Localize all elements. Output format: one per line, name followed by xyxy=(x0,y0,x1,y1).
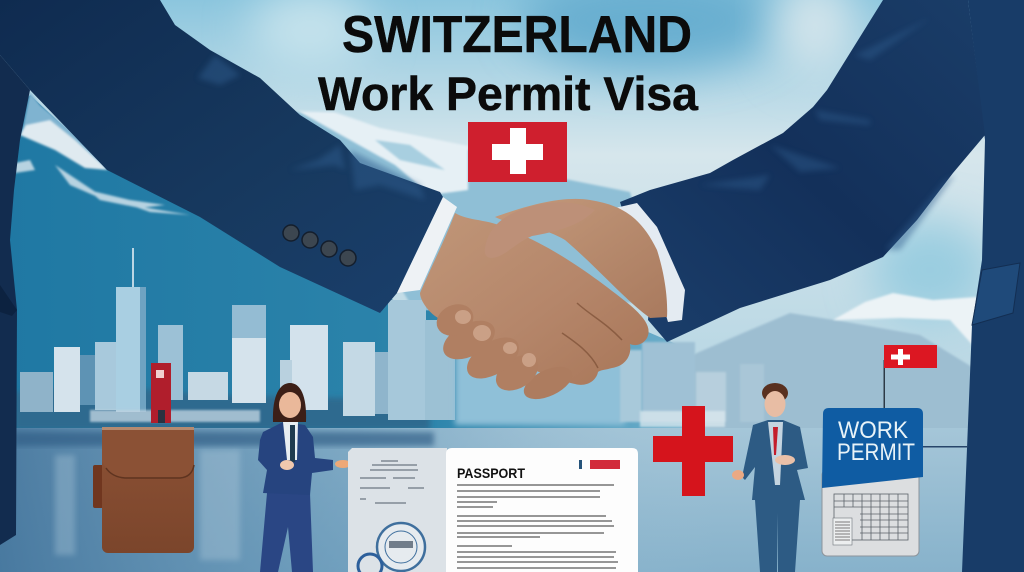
hand: folded fingers xyxy=(431,298,577,406)
icon: red cross xyxy=(653,406,733,496)
passport body text xyxy=(457,485,618,568)
card body xyxy=(822,470,919,556)
face xyxy=(279,392,301,418)
passport heading: PASSPORT xyxy=(457,465,525,481)
handshake xyxy=(420,199,667,406)
background: city skyline xyxy=(14,248,764,430)
right suit: jacket body xyxy=(962,0,1024,572)
hands xyxy=(732,470,744,480)
left suit: sleeve highlights xyxy=(198,55,425,200)
hair xyxy=(273,383,306,422)
hair xyxy=(762,383,788,403)
hands xyxy=(280,460,294,470)
document: passport left page xyxy=(348,448,447,572)
work permit card: PERMIT xyxy=(837,439,915,466)
left suit: sleeve xyxy=(0,0,443,313)
red tie xyxy=(773,427,778,455)
left suit: shirt cuff xyxy=(397,197,457,293)
hand: finger creases xyxy=(562,303,622,368)
connector line xyxy=(922,446,968,448)
right suit xyxy=(615,0,1024,572)
right mountains xyxy=(690,313,985,430)
blue header xyxy=(822,408,923,488)
small note sheet xyxy=(833,518,852,545)
flag on pole xyxy=(884,345,937,408)
title: SWITZERLAND xyxy=(342,6,692,64)
figure: businessman xyxy=(732,383,808,572)
center peak xyxy=(295,112,660,320)
background: lake water xyxy=(0,428,1024,572)
left suit: jacket body xyxy=(0,55,30,545)
icon: leather wallet xyxy=(93,427,194,553)
right suit: pocket flap xyxy=(972,263,1020,325)
left snow patches xyxy=(22,92,108,168)
trousers xyxy=(755,500,800,572)
face xyxy=(764,391,786,417)
background: snowy mountains xyxy=(0,92,985,432)
right suit: sleeve highlights xyxy=(700,18,955,250)
right suit: sleeve xyxy=(620,0,985,342)
red banner behind wallet xyxy=(151,363,171,423)
swiss flag xyxy=(468,122,567,182)
calendar grid xyxy=(834,494,908,540)
left blue backdrop xyxy=(0,95,690,432)
jacket xyxy=(258,422,333,495)
form lines xyxy=(360,461,424,503)
jacket xyxy=(742,420,808,500)
trousers xyxy=(260,493,313,572)
left suit: sleeve buttons xyxy=(283,225,356,266)
document: passport right page xyxy=(446,448,638,572)
hand: thumb xyxy=(485,202,595,258)
card text: WORK xyxy=(838,417,908,444)
passport logo xyxy=(590,460,620,469)
work permit card xyxy=(822,408,923,556)
title xyxy=(318,6,699,120)
hand: left hand xyxy=(420,213,649,385)
figure: businesswoman xyxy=(258,383,351,572)
hand: right arm back hand xyxy=(495,199,667,318)
right suit: shirt cuff xyxy=(615,203,685,322)
left suit xyxy=(0,0,457,545)
title: Work Permit Visa xyxy=(318,67,699,120)
round stamp xyxy=(358,523,425,572)
